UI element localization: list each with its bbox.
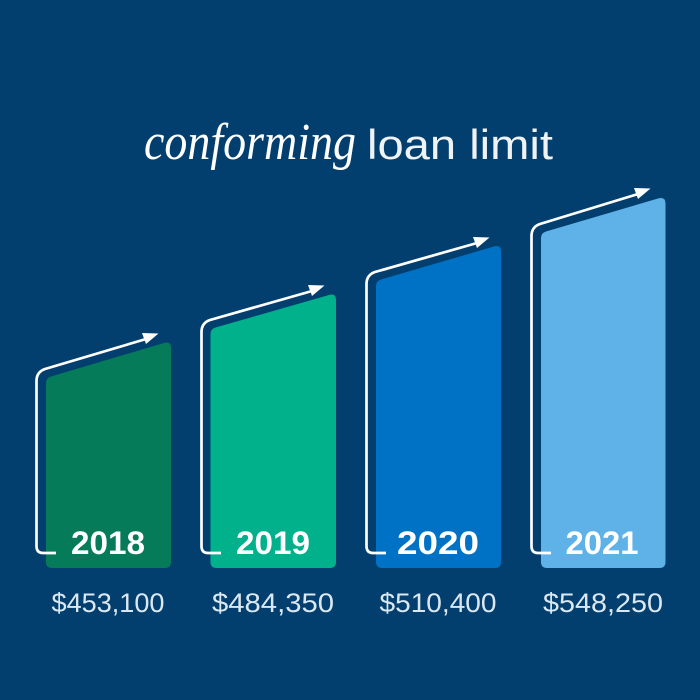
- title: loan limit: [367, 121, 553, 168]
- value 2018: $453,100: [52, 588, 164, 618]
- bar 2020: [376, 246, 501, 568]
- year label 2018: 2018: [71, 525, 145, 561]
- year label 2020: 2020: [397, 525, 479, 561]
- arrow 2021: [532, 188, 650, 553]
- bar group: 2018: [36, 333, 171, 618]
- value 2019: $484,350: [212, 588, 334, 618]
- bar group: 2021: [532, 188, 666, 618]
- bar 2021: [541, 198, 666, 568]
- arrow 2019: [202, 285, 324, 553]
- title: [144, 114, 553, 171]
- year label 2019: 2019: [236, 525, 310, 561]
- value 2020: $510,400: [380, 588, 496, 618]
- arrow 2020: [366, 237, 490, 553]
- bar group: 2020: [366, 237, 501, 618]
- bar group: 2019: [202, 285, 336, 618]
- value 2021: $548,250: [543, 588, 663, 618]
- bar 2018: [46, 343, 171, 568]
- year label 2021: 2021: [566, 525, 638, 561]
- arrow 2018: [36, 333, 158, 553]
- title: conforming: [144, 114, 356, 171]
- bar 2019: [210, 295, 336, 568]
